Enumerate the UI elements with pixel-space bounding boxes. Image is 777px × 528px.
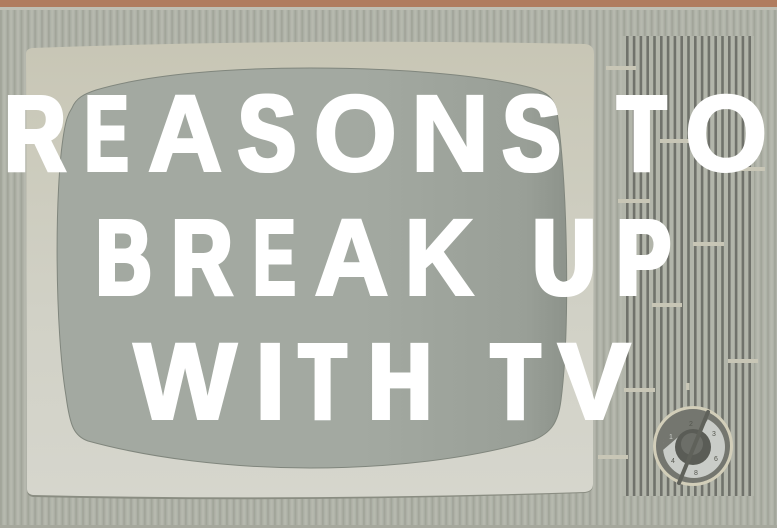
title: T — [618, 73, 666, 193]
title: P — [617, 198, 670, 318]
icon: tuning dial: 8 — [694, 470, 698, 477]
icon: tuning dial: 6 — [714, 456, 718, 463]
title: O — [685, 73, 767, 194]
icon: tuning dial: 1 — [669, 434, 673, 441]
title: W — [134, 321, 237, 441]
title: R — [5, 74, 65, 194]
icon: tuning dial: 3 — [712, 431, 716, 438]
title: N — [411, 72, 489, 194]
title: T — [492, 321, 540, 442]
title: I — [255, 321, 286, 442]
icon: tuning dial: 2 — [689, 421, 693, 428]
title: T — [300, 321, 346, 442]
title: U — [533, 196, 595, 318]
icon: tuning dial — [653, 406, 733, 486]
title: A — [148, 74, 222, 194]
title: S — [238, 73, 295, 194]
television screen — [57, 68, 567, 468]
title: V — [558, 321, 630, 441]
icon: tuning dial: 4 — [671, 458, 675, 465]
title — [5, 72, 767, 442]
screen bezel — [26, 42, 594, 499]
title: S — [503, 73, 560, 194]
title: B — [96, 197, 151, 318]
title: O — [314, 73, 397, 194]
speaker grille slots — [626, 36, 751, 496]
title: A — [314, 198, 389, 318]
title: E — [254, 197, 295, 318]
title: E — [85, 72, 128, 194]
title: R — [172, 198, 232, 318]
title: H — [369, 320, 431, 442]
title: K — [404, 197, 473, 318]
tuning slider marks — [598, 66, 765, 459]
